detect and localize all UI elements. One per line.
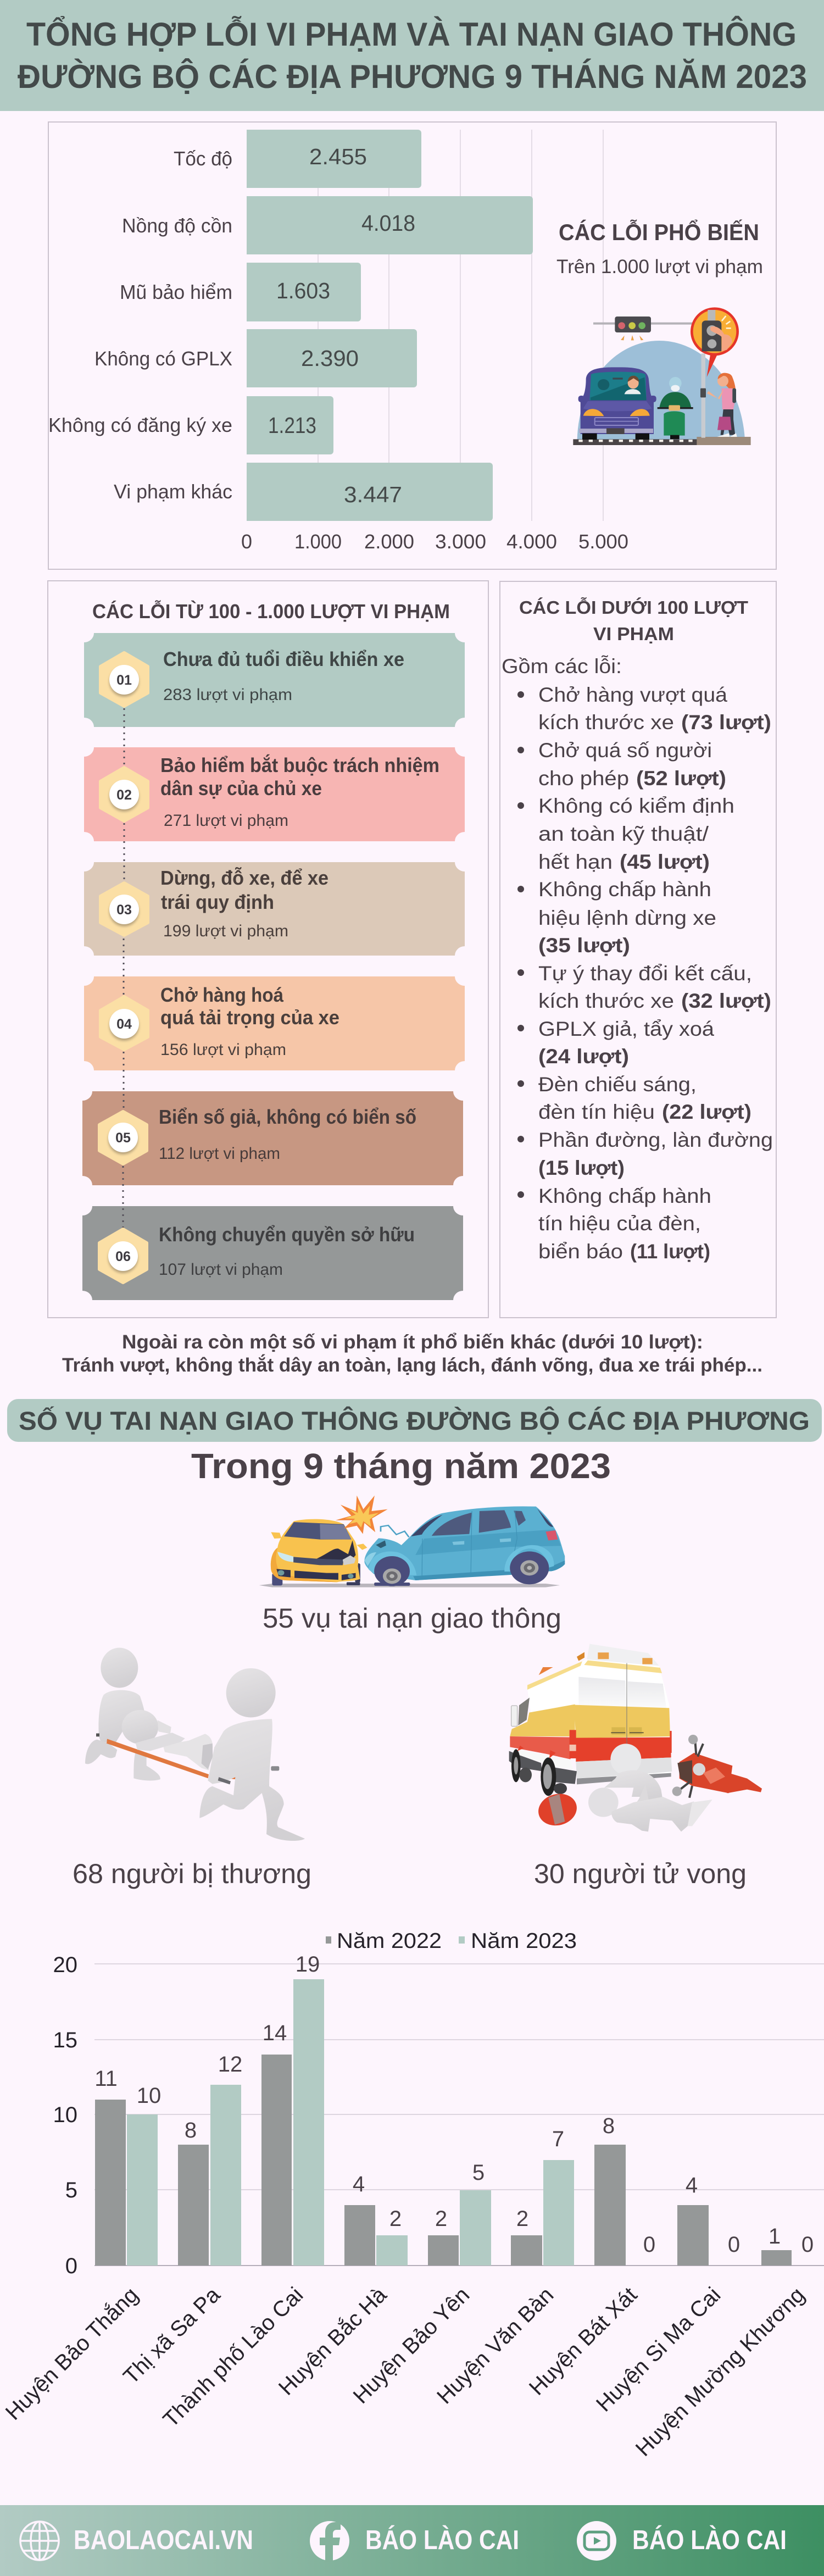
card 01 background	[84, 633, 465, 727]
list of violations: (52 lượt)	[636, 767, 726, 790]
data labels: 1	[769, 2224, 781, 2249]
card 01 text: 283 lượt vi phạm	[163, 686, 292, 704]
bar chart: violations over 1000: 5.000	[578, 530, 628, 553]
list of violations: GPLX giả, tẩy xoá	[538, 1018, 714, 1040]
list of violations: Không chấp hành	[538, 1185, 711, 1207]
list of violations: Không chấp hành	[538, 878, 711, 901]
bar chart: violations over 1000: 4.018	[361, 210, 415, 236]
badge 03	[101, 883, 148, 935]
bars 2022	[95, 2055, 792, 2266]
legend	[326, 1929, 577, 1953]
legend: Năm 2023	[471, 1929, 577, 1953]
x axis district labels: Huyện Bát Xát	[525, 2283, 642, 2400]
x axis district labels: Huyện Bảo Yên	[349, 2283, 474, 2408]
list of violations: kích thước xe	[538, 990, 674, 1012]
bar chart: violations over 1000: Vi phạm khác	[114, 480, 232, 503]
footer band	[0, 2505, 824, 2576]
y axis labels: 0	[65, 2254, 77, 2278]
x axis district labels: Thành phố Lào Cai	[159, 2283, 308, 2432]
badge 05	[99, 1112, 147, 1164]
data labels: 19	[296, 1952, 320, 1977]
heading: under 100 violations	[519, 597, 748, 644]
card 04 text: 156 lượt vi phạm	[160, 1041, 286, 1059]
title band: TỔNG HỢP LỖI VI PHẠM VÀ TAI NẠN GIAO THÔNG	[26, 16, 797, 53]
heading: under 100 violations: CÁC LỖI DƯỚI 100 LƯỢT	[519, 597, 748, 618]
list of violations: biển báo	[538, 1240, 623, 1263]
bar chart: violations over 1000: Tốc độ	[174, 147, 232, 170]
card 02 text	[160, 753, 439, 830]
card 06 text: 107 lượt vi phạm	[159, 1261, 283, 1279]
list of violations: kích thước xe	[538, 711, 674, 734]
subheading: over 1000 violations: Trên 1.000 lượt vi phạm	[556, 256, 763, 277]
subheading: in 9 months of 2023: Trong 9 tháng năm 2023	[191, 1446, 611, 1486]
list of violations: Chở hàng vượt quá	[538, 684, 727, 706]
list of violations: (11 lượt)	[630, 1240, 710, 1263]
list of violations: đèn tín hiệu	[538, 1101, 655, 1123]
data labels: 5	[472, 2161, 485, 2185]
bar chart: violations over 1000: 1.000	[294, 530, 342, 553]
icon: globe	[20, 2522, 59, 2560]
card 03 text	[160, 867, 329, 940]
caption: 30 deaths: 30 người tử vong	[534, 1858, 747, 1889]
card 02 text: dân sự của chủ xe	[160, 777, 322, 800]
icon: street scene with car, scooter, pedestrian and traffic light	[573, 309, 751, 445]
x axis district labels	[1, 2282, 809, 2461]
list of violations: an toàn kỹ thuật/	[538, 823, 709, 845]
card 06 text	[159, 1223, 415, 1279]
card 03 background	[84, 862, 465, 956]
card 05 text: Biển số giả, không có biển số	[159, 1106, 416, 1128]
list of violations: (24 lượt)	[538, 1045, 629, 1068]
list of violations: Tự ý thay đổi kết cấu,	[538, 962, 752, 985]
x axis district labels: Thị xã Sa Pa	[119, 2283, 225, 2389]
data labels: 14	[263, 2021, 287, 2045]
icon: youtube	[577, 2521, 616, 2561]
card 02 background	[84, 747, 465, 841]
bar chart: violations over 1000: 4.000	[506, 530, 557, 553]
legend: Năm 2022	[337, 1929, 442, 1953]
bar chart: violations over 1000: 3.447	[344, 482, 402, 507]
data labels: 2	[389, 2207, 402, 2231]
data labels: 11	[94, 2067, 118, 2091]
card 06 background	[82, 1206, 463, 1300]
data labels: 8	[603, 2114, 615, 2138]
bar chart: violations over 1000: 2.455	[309, 144, 367, 169]
list of violations: (15 lượt)	[538, 1157, 625, 1179]
bar chart: violations over 1000: 2.000	[364, 530, 414, 553]
list of violations: Chở quá số người	[538, 739, 712, 762]
badge 01: 01	[116, 673, 132, 688]
badge 06: 06	[115, 1249, 131, 1264]
icon: figures carrying a stretcher	[85, 1648, 305, 1841]
bar chart: violations over 1000: 1.603	[276, 278, 330, 303]
card 01 text: Chưa đủ tuổi điều khiển xe	[163, 648, 404, 670]
list of violations: Đèn chiếu sáng,	[538, 1073, 697, 1096]
bar chart: violations over 1000: Không có đăng ký xe	[48, 414, 232, 436]
title band: ĐƯỜNG BỘ CÁC ĐỊA PHƯƠNG 9 THÁNG NĂM 2023	[18, 58, 807, 95]
card 02 text: 271 lượt vi phạm	[164, 812, 288, 830]
data labels: 2	[435, 2207, 447, 2231]
card 04 background	[84, 976, 465, 1070]
badge 06	[99, 1229, 147, 1283]
caption: 68 injured: 68 người bị thương	[73, 1858, 311, 1889]
y axis labels: 15	[53, 2028, 77, 2052]
bars 2023	[127, 1979, 574, 2266]
list of violations: (32 lượt)	[681, 990, 771, 1012]
bar chart: violations over 1000: Không có GPLX	[94, 347, 232, 370]
icon: car crash	[259, 1496, 565, 1587]
card 03 text: trái quy định	[161, 891, 274, 913]
badge 04	[101, 997, 148, 1050]
bar chart: violations over 1000	[48, 130, 628, 553]
data labels: 8	[185, 2118, 197, 2142]
x axis district labels: Huyện Bảo Thắng	[1, 2283, 143, 2425]
x axis district labels: Huyện Mường Khương	[631, 2283, 809, 2461]
list of violations: (22 lượt)	[662, 1101, 751, 1123]
card 02 text: Bảo hiểm bắt buộc trách nhiệm	[160, 753, 439, 776]
icon: facebook	[310, 2521, 349, 2562]
list of violations: (35 lượt)	[538, 934, 630, 957]
data labels: 4	[686, 2173, 698, 2197]
icon: ambulance with injured person and fallen scooter	[509, 1644, 762, 1831]
data labels: 10	[137, 2084, 161, 2108]
bar chart: violations over 1000: Mũ bảo hiểm	[120, 281, 232, 303]
heading: under 100 violations: VI PHẠM	[593, 624, 674, 644]
bar chart: violations over 1000: 2.390	[301, 346, 359, 371]
badge 01	[101, 653, 148, 706]
list of violations: (73 lượt)	[681, 711, 771, 734]
list of violations: (45 lượt)	[620, 851, 710, 873]
list of violations: hết hạn	[538, 851, 613, 873]
list of violations: Không có kiểm định	[538, 795, 734, 817]
data labels: 7	[552, 2127, 564, 2151]
dotted connector	[123, 708, 124, 1228]
y axis labels: 20	[53, 1953, 77, 1977]
bar chart: violations over 1000: 3.000	[435, 530, 486, 553]
x axis district labels: Huyện Si Ma Cai	[592, 2283, 725, 2417]
facebook page text: BÁO LÀO CAI	[365, 2525, 519, 2555]
caption: 55 accidents: 55 vụ tai nạn giao thông	[263, 1603, 561, 1634]
card 05 background	[82, 1091, 463, 1185]
data labels: 0	[643, 2233, 655, 2257]
y axis labels: 5	[65, 2178, 77, 2202]
data labels: 4	[353, 2172, 365, 2196]
title band	[0, 0, 824, 111]
note: other violations under 10: Tránh vượt, không thắt dây an toàn, lạng lách, đánh võng, đua xe trái phép...	[62, 1354, 762, 1376]
y axis labels	[53, 1953, 77, 2278]
data labels: 12	[218, 2052, 242, 2077]
heading: common violations: CÁC LỖI PHỔ BIẾN	[559, 218, 759, 245]
y axis labels: 10	[53, 2103, 77, 2127]
bar chart: violations over 1000: 0	[241, 530, 252, 553]
list of violations: Phần đường, làn đường	[538, 1129, 773, 1151]
data labels	[94, 1952, 814, 2257]
badge 04: 04	[116, 1017, 132, 1032]
section heading band: accidents: SỐ VỤ TAI NẠN GIAO THÔNG ĐƯỜNG BỘ CÁC ĐỊA PHƯƠNG	[19, 1406, 810, 1435]
card 05 text	[159, 1106, 416, 1163]
card 04 text: Chở hàng hoá	[160, 984, 284, 1006]
list of violations: tín hiệu của đèn,	[538, 1212, 701, 1235]
card 04 text: quá tải trọng của xe	[160, 1006, 339, 1029]
panel: violations under 100	[500, 581, 776, 1318]
x axis district labels: Huyện Bắc Hà	[274, 2282, 392, 2400]
bar chart: accidents by district	[1, 1929, 824, 2461]
youtube channel text: BÁO LÀO CAI	[632, 2525, 787, 2555]
section heading band: accidents	[7, 1399, 822, 1442]
card 06 text: Không chuyển quyền sở hữu	[159, 1223, 415, 1246]
note: other violations under 10	[62, 1331, 762, 1376]
badge 05: 05	[115, 1130, 131, 1146]
data labels: 0	[728, 2233, 740, 2257]
data labels: 0	[801, 2233, 814, 2257]
badge 03: 03	[116, 902, 132, 918]
badge 02: 02	[116, 787, 132, 803]
x axis district labels: Huyện Văn Bàn	[432, 2283, 558, 2408]
note: other violations under 10: Ngoài ra còn một số vi phạm ít phổ biến khác (dưới 10 lượt):	[122, 1331, 703, 1353]
badge 02	[101, 768, 148, 821]
heading: 100 to 1000 violations: CÁC LỖI TỪ 100 - 1.000 LƯỢT VI PHẠM	[92, 599, 450, 623]
panel: violations from 100 to 1000	[48, 581, 488, 1318]
list of violations: hiệu lệnh dừng xe	[538, 907, 716, 929]
data labels: 2	[516, 2207, 528, 2231]
website text: BAOLAOCAI.VN	[74, 2525, 253, 2555]
card 03 text: Dừng, đỗ xe, để xe	[160, 867, 329, 889]
panel: common violations	[48, 122, 776, 569]
card 03 text: 199 lượt vi phạm	[163, 922, 288, 940]
card 05 text: 112 lượt vi phạm	[159, 1145, 280, 1163]
list of violations: cho phép	[538, 767, 629, 790]
list of violations	[517, 684, 773, 1263]
card 04 text	[160, 984, 339, 1059]
bar chart: violations over 1000: Nồng độ cồn	[122, 214, 232, 237]
card 01 text	[163, 648, 404, 704]
bar chart: violations over 1000: 1.213	[268, 413, 316, 438]
list intro: Gồm các lỗi:	[502, 655, 622, 678]
